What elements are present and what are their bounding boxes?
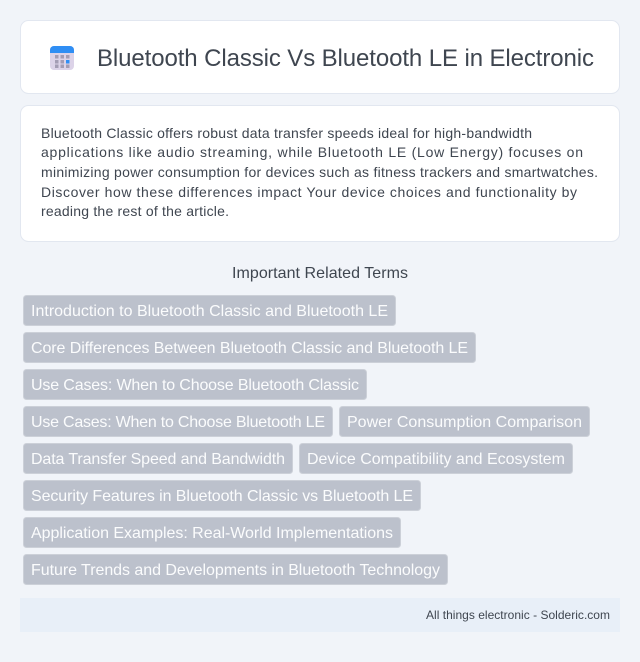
tag 2 bbox=[24, 332, 476, 362]
heading: related terms: Important Related Terms bbox=[232, 265, 408, 282]
tag 2: Core Differences Between Bluetooth Classic and Bluetooth LE bbox=[31, 340, 468, 357]
tag 8: Security Features in Bluetooth Classic vs Bluetooth LE bbox=[31, 488, 413, 505]
tag 4 bbox=[24, 406, 332, 436]
tag 6 bbox=[24, 444, 292, 474]
header panel bbox=[20, 20, 620, 94]
tag 6: Data Transfer Speed and Bandwidth bbox=[31, 451, 285, 468]
tag 1 bbox=[24, 296, 396, 326]
tag 8 bbox=[24, 480, 420, 510]
tag 5: Power Consumption Comparison bbox=[347, 414, 582, 431]
tag 3 bbox=[24, 370, 366, 400]
tag 7: Device Compatibility and Ecosystem bbox=[307, 451, 565, 468]
tag 9 bbox=[24, 518, 400, 548]
tag 7 bbox=[300, 444, 572, 474]
panel: intro text: minimizing power consumption for devices such as fitness trackers and smartwatches. bbox=[41, 164, 598, 180]
panel: intro text bbox=[20, 106, 620, 242]
tag 5 bbox=[340, 406, 590, 436]
footer bbox=[20, 598, 620, 632]
panel: intro text: Discover how these differences impact Your device choices and functionality by bbox=[41, 184, 577, 200]
panel: intro text: reading the rest of the article. bbox=[41, 203, 229, 219]
tag 3: Use Cases: When to Choose Bluetooth Classic bbox=[31, 377, 359, 394]
tag 10 bbox=[24, 554, 448, 584]
tag 1: Introduction to Bluetooth Classic and Bluetooth LE bbox=[31, 303, 388, 320]
title: Bluetooth Classic Vs Bluetooth LE in Electronic bbox=[97, 45, 594, 72]
icon: calendar bbox=[50, 46, 74, 70]
tag 10: Future Trends and Developments in Bluetooth Technology bbox=[31, 562, 440, 579]
tag 4: Use Cases: When to Choose Bluetooth LE bbox=[31, 414, 325, 431]
footer: All things electronic - Solderic.com bbox=[426, 608, 610, 622]
tag 9: Application Examples: Real-World Implementations bbox=[31, 525, 393, 542]
tag list bbox=[24, 296, 590, 584]
panel: intro text: Bluetooth Classic offers robust data transfer speeds ideal for high-bandwidth bbox=[41, 125, 532, 141]
panel: intro text: applications like audio streaming, while Bluetooth LE (Low Energy) focuses on bbox=[41, 144, 583, 160]
